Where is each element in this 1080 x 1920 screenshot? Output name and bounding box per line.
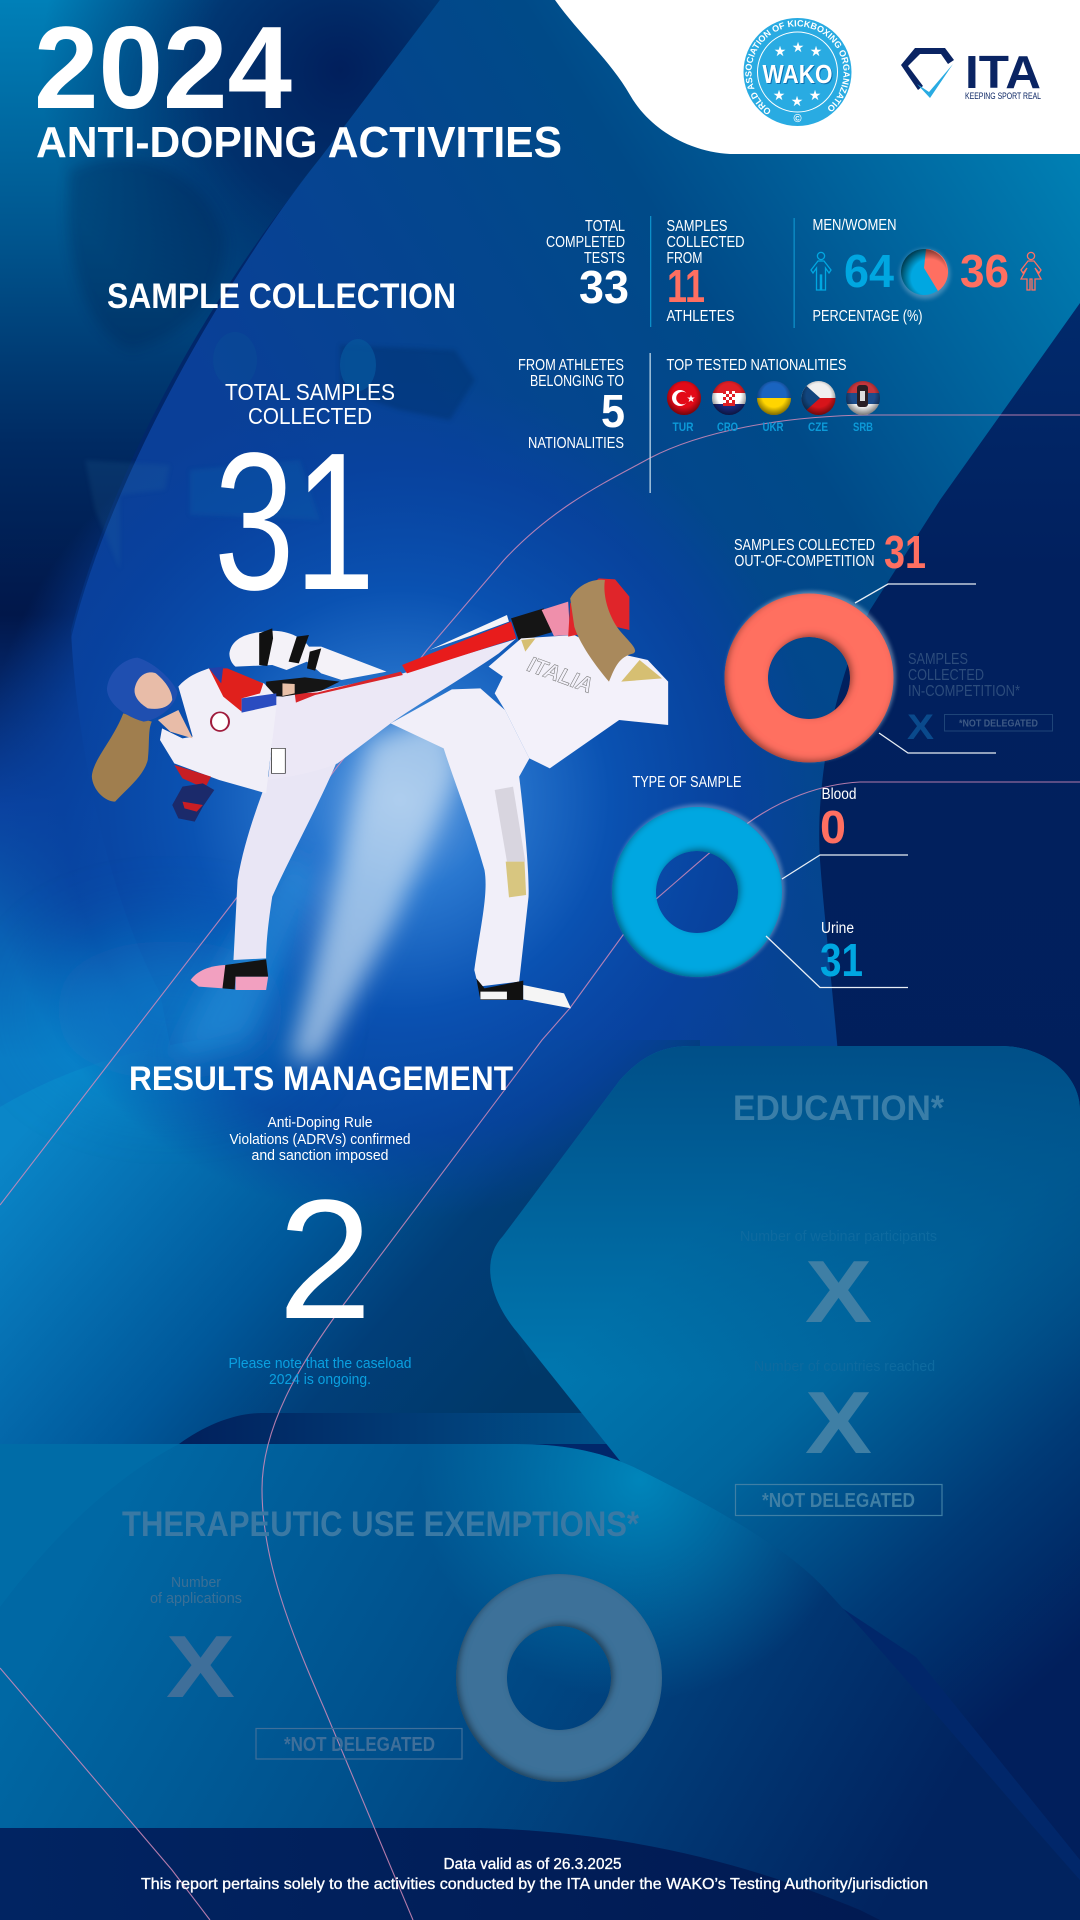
title	[34, 2, 562, 167]
flag labels: UKR	[762, 422, 784, 434]
stat: webinar participants: Number of webinar participants	[740, 1228, 937, 1245]
label: samples collected in-competition	[907, 651, 1052, 747]
stat: men and women percentage: MEN/WOMEN	[812, 217, 896, 234]
stat: total completed tests: TESTS	[584, 250, 625, 267]
logo: WAKO: WAKO	[762, 59, 832, 89]
flag labels	[672, 422, 873, 434]
note: caseload	[228, 1355, 412, 1388]
label: samples collected in-competition: *NOT DELEGATED	[959, 718, 1038, 730]
label: urine: Urine	[821, 920, 854, 937]
callout: not delegated	[736, 1484, 942, 1516]
label: blood: 0	[820, 801, 846, 853]
background: results panel	[0, 1040, 700, 1444]
stat: ADRV count: 2	[278, 1165, 372, 1355]
label: urine: 31	[820, 934, 863, 986]
fighter: kicking athlete jacket	[160, 668, 276, 793]
panel: results management	[129, 1060, 513, 1388]
fighter: kicking athlete foot	[191, 959, 268, 990]
background: footer band	[0, 1828, 880, 1920]
background: education panel	[490, 1046, 1080, 1860]
background: left dark panel	[0, 0, 440, 1200]
fighter: arm	[266, 677, 340, 697]
stat: men and women percentage	[811, 217, 1041, 325]
label: blood	[782, 786, 908, 879]
background: ghost photo crowd	[68, 158, 475, 570]
callout: not delegated: *NOT DELEGATED	[284, 1734, 435, 1756]
stat: samples collected from athletes: SAMPLES	[666, 218, 728, 235]
fighter: opponent trouser mesh	[495, 787, 525, 862]
top tested nationalities	[666, 357, 880, 434]
fighter: red sleeve	[209, 667, 276, 713]
callout: not delegated	[256, 1728, 462, 1759]
background: upper panel	[0, 0, 1080, 1200]
logo: WAKO: ★	[810, 43, 822, 59]
stat: applications: X	[166, 1617, 235, 1716]
heading: therapeutic use exemptions: THERAPEUTIC USE EXEMPTIONS*	[122, 1505, 639, 1544]
title: ANTI-DOPING ACTIVITIES	[36, 118, 562, 167]
note: caseload: 2024 is ongoing.	[269, 1371, 371, 1388]
header white panel with logos	[555, 0, 1080, 154]
logo: WAKO: ★	[773, 87, 785, 103]
text: ADRV description: Violations (ADRVs) confirmed	[230, 1131, 410, 1148]
fighter: raised glove and shin	[229, 628, 387, 680]
text: number of applications: Number	[171, 1574, 221, 1591]
fighter: opponent jacket	[489, 635, 668, 768]
flag: Turkey	[667, 381, 701, 415]
flag: Serbia	[846, 381, 880, 415]
background: cyan lower glow	[50, 940, 290, 1080]
logo: WAKO	[744, 18, 852, 126]
fighter: opponent glove	[511, 602, 570, 642]
donut: therapeutic use exemptions	[456, 1574, 662, 1782]
logo: WAKO: ★	[792, 39, 804, 55]
label: samples collected out-of-competition	[734, 526, 996, 753]
stat: men and women percentage: 36	[960, 245, 1009, 297]
text: ADRV description: Anti-Doping Rule	[268, 1114, 372, 1131]
stat: total completed tests: COMPLETED	[546, 234, 625, 251]
fighter: standing leg	[233, 760, 338, 960]
stat: total samples collected: TOTAL SAMPLES	[225, 379, 395, 405]
flag labels: CZE	[808, 422, 828, 434]
fighter: neck	[158, 710, 193, 738]
logo: WAKO: ©	[793, 113, 802, 125]
fighters photo illustration	[92, 578, 668, 1008]
footer note: Data valid as of 26.3.2025	[444, 1856, 622, 1873]
background: light streaks	[170, 710, 460, 1060]
label: samples collected in-competition: SAMPLES	[908, 651, 968, 668]
logo: WAKO: ★	[809, 87, 821, 103]
background: central glow	[0, 380, 820, 1220]
stat: samples collected from athletes	[666, 218, 744, 325]
stat: webinar participants: X	[805, 1242, 872, 1341]
fighter: opponent helmet	[568, 578, 629, 637]
background: navy lower right plane	[819, 303, 1080, 1200]
fighter: lower glove	[172, 765, 214, 822]
flag: Czechia	[801, 381, 836, 415]
fighter: opponent foot	[476, 978, 571, 1008]
note: caseload: Please note that the caseload	[228, 1355, 412, 1372]
stat: nationalities: FROM ATHLETES	[518, 357, 624, 374]
heading: results management: RESULTS MANAGEMENT	[129, 1060, 513, 1098]
panel: therapeutic use exemptions	[122, 1505, 662, 1782]
fighter: helmet	[107, 658, 178, 722]
logo: WAKO: ★	[774, 43, 786, 59]
stat: countries reached: X	[805, 1373, 872, 1472]
title: 2024	[34, 2, 292, 133]
stat: total completed tests	[546, 218, 629, 313]
flag labels: TUR	[672, 422, 694, 434]
label: samples collected out-of-competition: OUT-OF-COMPETITION	[734, 553, 874, 570]
icon: woman	[1021, 252, 1041, 290]
stat: nationalities: 5	[601, 385, 625, 437]
background: therapeutic use exemptions panel	[0, 1444, 1080, 1920]
fighter: opponent hair	[570, 580, 635, 682]
logo: ITA: KEEPING SPORT REAL	[965, 91, 1041, 102]
fighter: kicking athlete hair	[92, 713, 152, 802]
label: urine	[766, 920, 908, 988]
stat: nationalities: BELONGING TO	[530, 373, 624, 390]
fighter: opponent leg and hips	[391, 688, 529, 987]
stat: men and women percentage: 64	[844, 245, 894, 297]
logo: WAKO: WAKO	[764, 60, 834, 90]
logo: WAKO: ★	[791, 93, 803, 109]
fighter: red trouser stripe	[402, 622, 516, 673]
text: ADRV description	[230, 1114, 410, 1164]
flag labels: SRB	[853, 422, 873, 434]
stat: total samples collected: COLLECTED	[248, 403, 372, 429]
fighter: badge	[211, 712, 229, 731]
panel: education	[733, 1089, 944, 1516]
stat: samples collected from athletes: 11	[667, 260, 705, 312]
stat: nationalities: NATIONALITIES	[528, 435, 624, 452]
icon: man	[811, 252, 831, 290]
text: number of applications	[150, 1574, 242, 1607]
stat: nationalities	[518, 357, 625, 452]
callout: not delegated: *NOT DELEGATED	[762, 1490, 915, 1512]
text: number of applications: of applications	[150, 1590, 242, 1607]
stat: total completed tests: TOTAL	[585, 218, 625, 235]
label: blood: Blood	[822, 786, 856, 803]
donut: type of sample	[612, 807, 782, 977]
top tested nationalities: TOP TESTED NATIONALITIES	[666, 357, 846, 374]
stat: men and women percentage: PERCENTAGE (%)	[812, 308, 922, 325]
flag: Turkey: ★	[687, 394, 696, 405]
stat: total samples collected: 31	[214, 412, 375, 631]
flag: Ukraine	[757, 381, 791, 415]
fighter: opponent shirt lettering: ITALIA	[523, 653, 598, 698]
label: samples collected in-competition: IN-COMPETITION*	[908, 683, 1020, 700]
stat: samples collected from athletes: ATHLETES	[666, 308, 734, 325]
label: type of sample: TYPE OF SAMPLE	[632, 774, 742, 791]
label: samples collected out-of-competition: SAMPLES COLLECTED	[734, 537, 875, 554]
logo: ITA	[901, 46, 1041, 102]
footer note	[141, 1856, 928, 1893]
flag labels: CRO	[717, 422, 738, 434]
fighter: face	[135, 672, 172, 709]
text: ADRV description: and sanction imposed	[252, 1147, 388, 1164]
footer note: This report pertains solely to the activities conducted by the ITA under the WAKO’s Testing Authority/jurisdiction	[141, 1876, 928, 1893]
pie: men women	[900, 249, 950, 299]
stat: countries reached	[754, 1358, 935, 1472]
label: samples collected out-of-competition: 31	[884, 526, 926, 578]
donut: samples collected out-of-competition	[725, 594, 894, 762]
flag: Croatia	[712, 381, 746, 415]
stat: webinar participants	[740, 1228, 937, 1341]
stat: countries reached: Number of countries reached	[754, 1358, 935, 1375]
pink curved lines	[0, 415, 1080, 1920]
heading: sample collection: SAMPLE COLLECTION	[107, 277, 456, 316]
label: samples collected in-competition: COLLECTED	[908, 667, 984, 684]
background: dark divider band	[179, 1413, 680, 1444]
stat: samples collected from athletes: COLLECTED	[666, 234, 744, 251]
logo: ITA: ITA	[965, 46, 1041, 98]
fighter: kicking leg	[268, 638, 516, 780]
label: samples collected in-competition: X	[907, 708, 935, 747]
stat: samples collected from athletes: FROM	[666, 250, 702, 267]
stat: total completed tests: 33	[579, 261, 629, 313]
heading: education: EDUCATION*	[733, 1089, 944, 1128]
